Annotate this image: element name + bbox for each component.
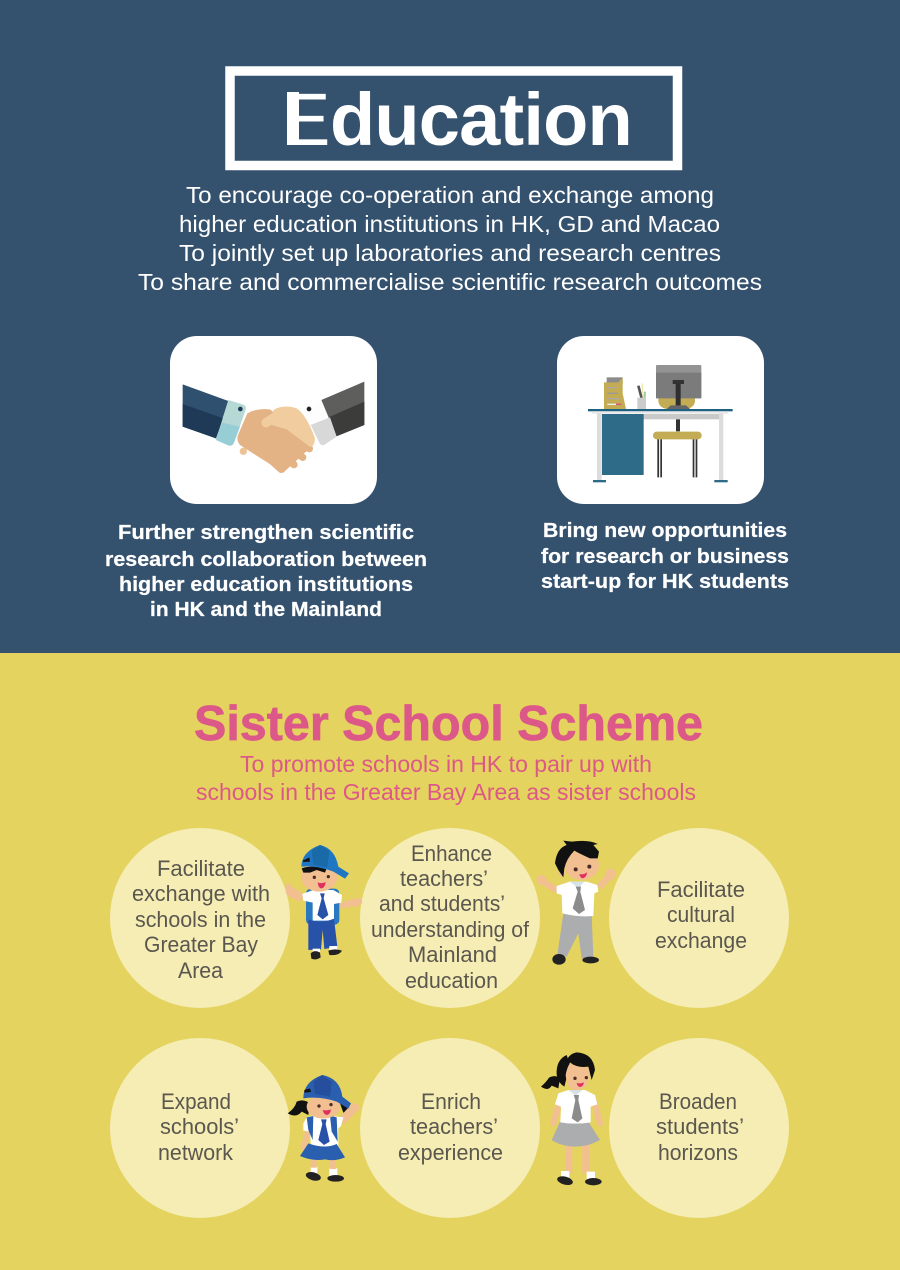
circle: facilitate exchange: exchange with [132,881,270,906]
icon: boy with grey tie [537,841,616,965]
icon: boy with blue cap [285,845,362,959]
circle: expand network: schools’ [160,1114,239,1139]
circle: expand network [110,1038,290,1218]
circle: broaden horizons [609,1038,789,1218]
title: Education: ducation [330,78,632,161]
heading: Sister School Scheme: Sister School Scheme [194,697,703,751]
circle: broaden horizons: students’ [656,1114,744,1139]
circle: cultural exchange: cultural [667,902,735,927]
circle: enhance understanding [360,828,540,1008]
text block: research collaboration [105,521,427,621]
circle: enrich experience: experience [398,1140,503,1165]
circle: enhance understanding: understanding of [371,917,530,942]
panel: education [0,0,900,653]
text block: new opportunities [541,519,789,593]
icon: office desk [588,365,733,482]
circle: facilitate exchange: Greater Bay [144,932,258,957]
circle: facilitate exchange: Facilitate [157,856,245,881]
circle: enhance understanding: teachers’ [400,866,488,891]
circle: facilitate exchange [110,828,290,1008]
text block: research collaboration: higher education institutions [119,573,413,596]
circle: enrich experience: Enrich [421,1089,481,1114]
text block: scheme aim: schools in the Greater Bay Area as sister schools [196,779,696,805]
card: office desk [557,336,764,504]
text block: education aims: To share and commercialise scientific research outcomes [138,269,762,295]
card: handshake [170,336,377,504]
text block: education aims [138,182,762,295]
text block: new opportunities: for research or business [541,545,789,568]
text block: education aims: higher education institutions in HK, GD and Macao [179,211,720,237]
text block: research collaboration: research collaboration between [105,548,427,571]
text block: education aims: To jointly set up laboratories and research centres [179,240,721,266]
icon: handshake [183,382,364,473]
title: Education: E [281,78,330,161]
text block: scheme aim: To promote schools in HK to pair up with [240,751,652,777]
icon: girl with grey skirt [541,1052,602,1187]
circle: facilitate exchange: schools in the [135,907,266,932]
circle: cultural exchange: exchange [655,928,747,953]
circle: enhance understanding: and students’ [379,891,505,916]
text block: scheme aim [196,751,696,805]
text block: education aims: To encourage co-operation and exchange among [186,182,714,208]
circle: enhance understanding: education [405,968,498,993]
circle: broaden horizons: horizons [658,1140,738,1165]
circle: enhance understanding: Enhance [411,841,492,866]
text block: new opportunities: start-up for HK students [541,570,789,593]
circle: expand network: network [158,1140,234,1165]
circle: enrich experience: teachers’ [410,1114,498,1139]
circle: cultural exchange [609,828,789,1008]
text block: new opportunities: Bring new opportunities [543,519,787,542]
panel: sister school scheme [0,653,900,1270]
circle: broaden horizons: Broaden [659,1089,737,1114]
title: Education [230,71,678,166]
circle: expand network: Expand [161,1089,231,1114]
text block: research collaboration: Further strengthen scientific [118,521,414,544]
circle: cultural exchange: Facilitate [657,877,745,902]
circle: enrich experience [360,1038,540,1218]
icon: girl with blue cap [288,1075,360,1182]
circle: facilitate exchange: Area [178,958,224,983]
circle: enhance understanding: Mainland [408,942,497,967]
text block: research collaboration: in HK and the Mainland [150,598,382,621]
